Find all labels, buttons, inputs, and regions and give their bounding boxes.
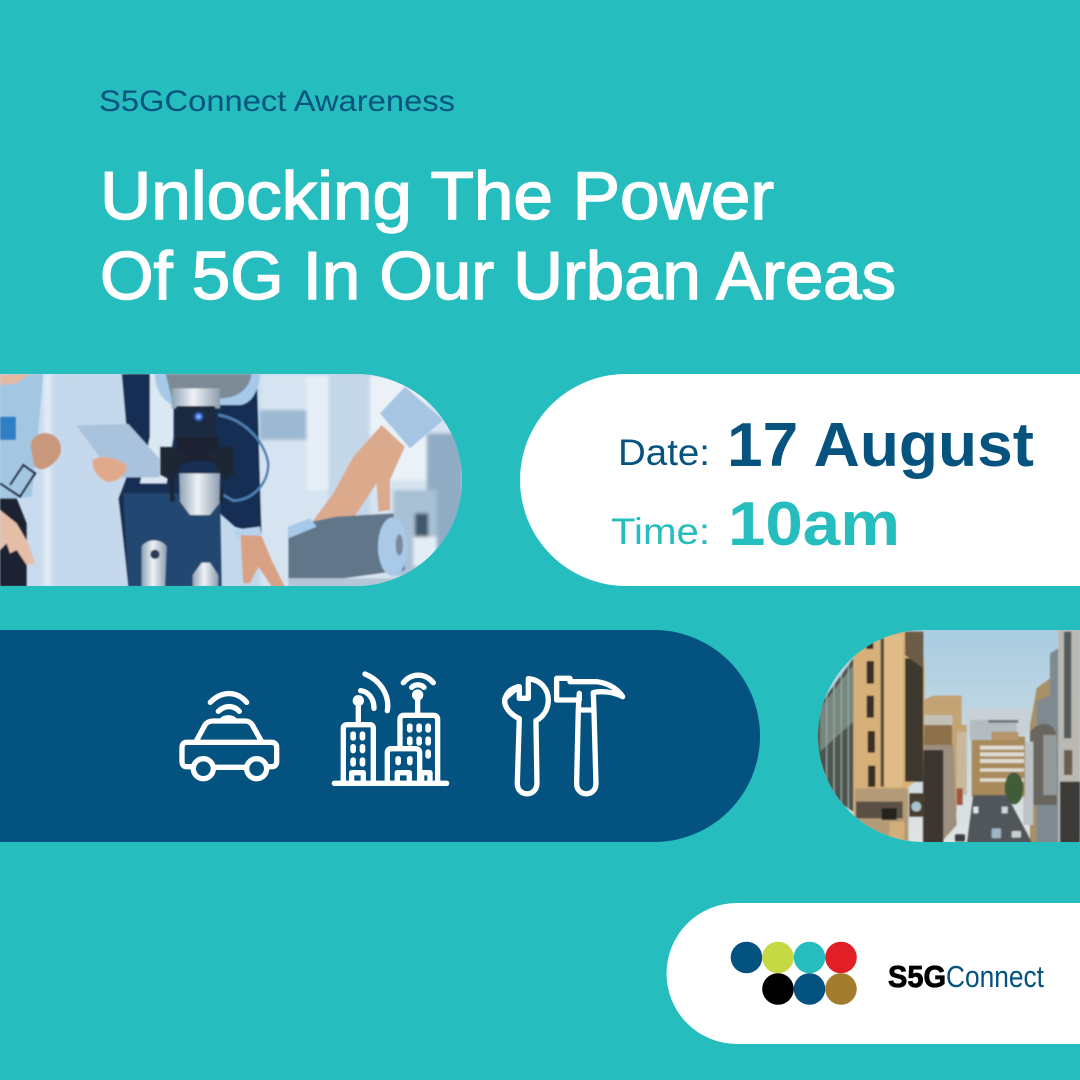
icon: smart city buildings [334,674,447,783]
robot joint [288,513,405,578]
logo: coloured dots [731,942,857,1005]
photo: engineers with robotic arm [0,374,470,587]
date and time card [520,374,1080,586]
title [100,158,896,314]
parts on table [142,540,167,587]
right buildings [1030,678,1050,845]
logo card [666,903,1080,1044]
title: Unlocking The Power [100,158,774,234]
date and time text [611,411,1034,559]
title: Of 5G In Our Urban Areas [100,238,896,314]
logo: wordmark: S5G [888,959,946,994]
date and time text: 17 August [727,411,1034,480]
eyebrow text: S5GConnect Awareness [99,85,455,118]
tablet [76,424,159,477]
sleeve and lower hand [233,527,262,540]
robot arm [155,374,260,405]
tree [1005,772,1023,804]
logo: wordmark: Connect [946,959,1044,994]
icons [182,674,623,794]
navy band [0,630,760,842]
right hand [310,425,405,527]
icon: connected car [182,694,277,779]
date and time text: Time: [611,511,710,552]
glass building left [818,658,854,812]
main sandstone building [853,632,925,842]
photo: city street [810,630,1080,845]
date and time text: 10am [728,490,900,559]
left person shirt [0,374,43,500]
distant haze [967,708,1040,735]
logo: wordmark [888,959,1044,994]
center building [972,737,1025,797]
mid left buildings [923,696,967,812]
center person [118,374,262,587]
street [967,795,1033,845]
date and time text: Date: [618,432,710,473]
icon: wrench and hammer [505,678,623,794]
